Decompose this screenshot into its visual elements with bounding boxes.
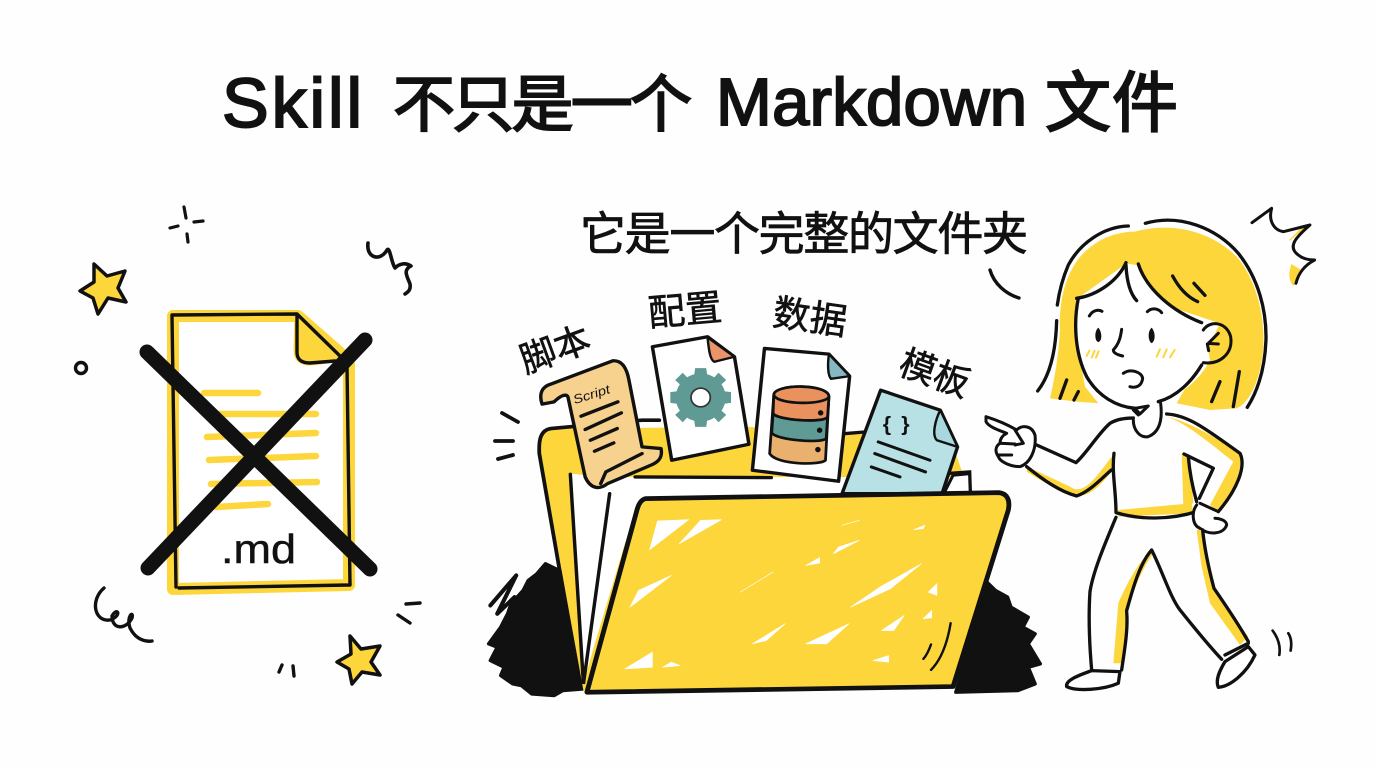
title: 文件 bbox=[1045, 66, 1178, 140]
title: 不只是一个 bbox=[393, 71, 692, 140]
data folded corner bbox=[828, 354, 850, 379]
face outline bbox=[1076, 298, 1202, 408]
neck and collar bbox=[1133, 403, 1161, 437]
doodle: sparkle bbox=[170, 207, 203, 242]
file: config sheet with gear bbox=[652, 337, 749, 460]
exclamation doodle yellow bbox=[1290, 225, 1310, 285]
inner page outline bbox=[570, 432, 970, 684]
doodle: squiggle top right bbox=[368, 243, 411, 294]
file: folded corner bbox=[296, 314, 340, 363]
label: config: 配置 bbox=[646, 287, 724, 334]
folder front ink marks bbox=[923, 623, 951, 670]
file: extension label: .md bbox=[221, 526, 296, 572]
ink scribble right bbox=[956, 582, 1040, 692]
icon: gear bbox=[670, 368, 731, 427]
doodle: curl bottom left bbox=[95, 588, 152, 641]
trousers yellow shading bbox=[1113, 530, 1248, 663]
speech tick bbox=[990, 270, 1019, 298]
fringe bbox=[1077, 263, 1205, 323]
hair outline bbox=[1038, 220, 1266, 407]
small tab behind front bbox=[944, 474, 970, 494]
label: script: 脚本 bbox=[514, 318, 596, 381]
pointing hand bbox=[986, 417, 1035, 467]
hand on hip bbox=[1193, 503, 1227, 533]
folder back panel bbox=[540, 427, 970, 691]
big black X bbox=[147, 340, 370, 569]
crossed-out markdown file bbox=[147, 314, 370, 589]
doodle: ticks near star bbox=[279, 603, 420, 676]
ink scribble tail left bbox=[490, 575, 516, 614]
face bbox=[1076, 263, 1210, 406]
title: Markdown bbox=[716, 65, 1027, 140]
shirt outline bbox=[1027, 414, 1242, 518]
trousers outline bbox=[1089, 517, 1248, 670]
hair fill bbox=[1050, 228, 1264, 410]
yellow patch beside page bbox=[594, 514, 642, 677]
subtitle: 它是一个完整的文件夹 bbox=[580, 208, 1028, 260]
exclamation doodle bbox=[1252, 208, 1315, 283]
motion ticks by foot bbox=[1273, 631, 1291, 655]
file: yellow outline bbox=[173, 316, 349, 589]
scroll scribbled title: Script bbox=[571, 381, 613, 407]
shirt yellow shading bbox=[1027, 417, 1241, 517]
file: template sheet with code braces bbox=[842, 390, 958, 494]
folder front panel bbox=[587, 493, 1009, 692]
eyes bbox=[1096, 328, 1154, 343]
scroll text lines bbox=[581, 402, 642, 484]
character: girl pointing bbox=[986, 208, 1315, 690]
right shoe bbox=[1217, 647, 1255, 687]
eyebrows nose mouth bbox=[1089, 309, 1162, 387]
file: script scroll bbox=[541, 361, 661, 488]
folder front highlights bbox=[625, 520, 937, 669]
template text lines bbox=[871, 442, 930, 477]
title: Skill bbox=[222, 64, 362, 142]
file: data sheet with database bbox=[752, 348, 850, 481]
blush marks bbox=[1087, 349, 1175, 358]
folder back outline bbox=[539, 420, 659, 687]
template folded corner bbox=[934, 410, 958, 447]
doodle: star bottom right bbox=[337, 636, 380, 684]
folder with contents bbox=[489, 337, 1040, 696]
config folded corner bbox=[708, 337, 734, 362]
code braces: {} bbox=[883, 413, 910, 436]
left shoe bbox=[1067, 671, 1120, 690]
doodle: small circle bbox=[76, 362, 86, 374]
label: template: 模板 bbox=[894, 342, 976, 405]
icon: database cylinder bbox=[770, 387, 829, 463]
file: yellow text lines bbox=[204, 393, 317, 507]
label: data: 数据 bbox=[770, 292, 849, 343]
ink scribble left bbox=[489, 564, 583, 696]
inner white page bbox=[570, 474, 970, 684]
ear bbox=[1203, 324, 1231, 363]
motion ticks by folder bbox=[495, 413, 518, 459]
title bbox=[222, 64, 1178, 142]
file: black ink lines bbox=[172, 314, 350, 588]
doodle: star top left bbox=[80, 264, 126, 314]
